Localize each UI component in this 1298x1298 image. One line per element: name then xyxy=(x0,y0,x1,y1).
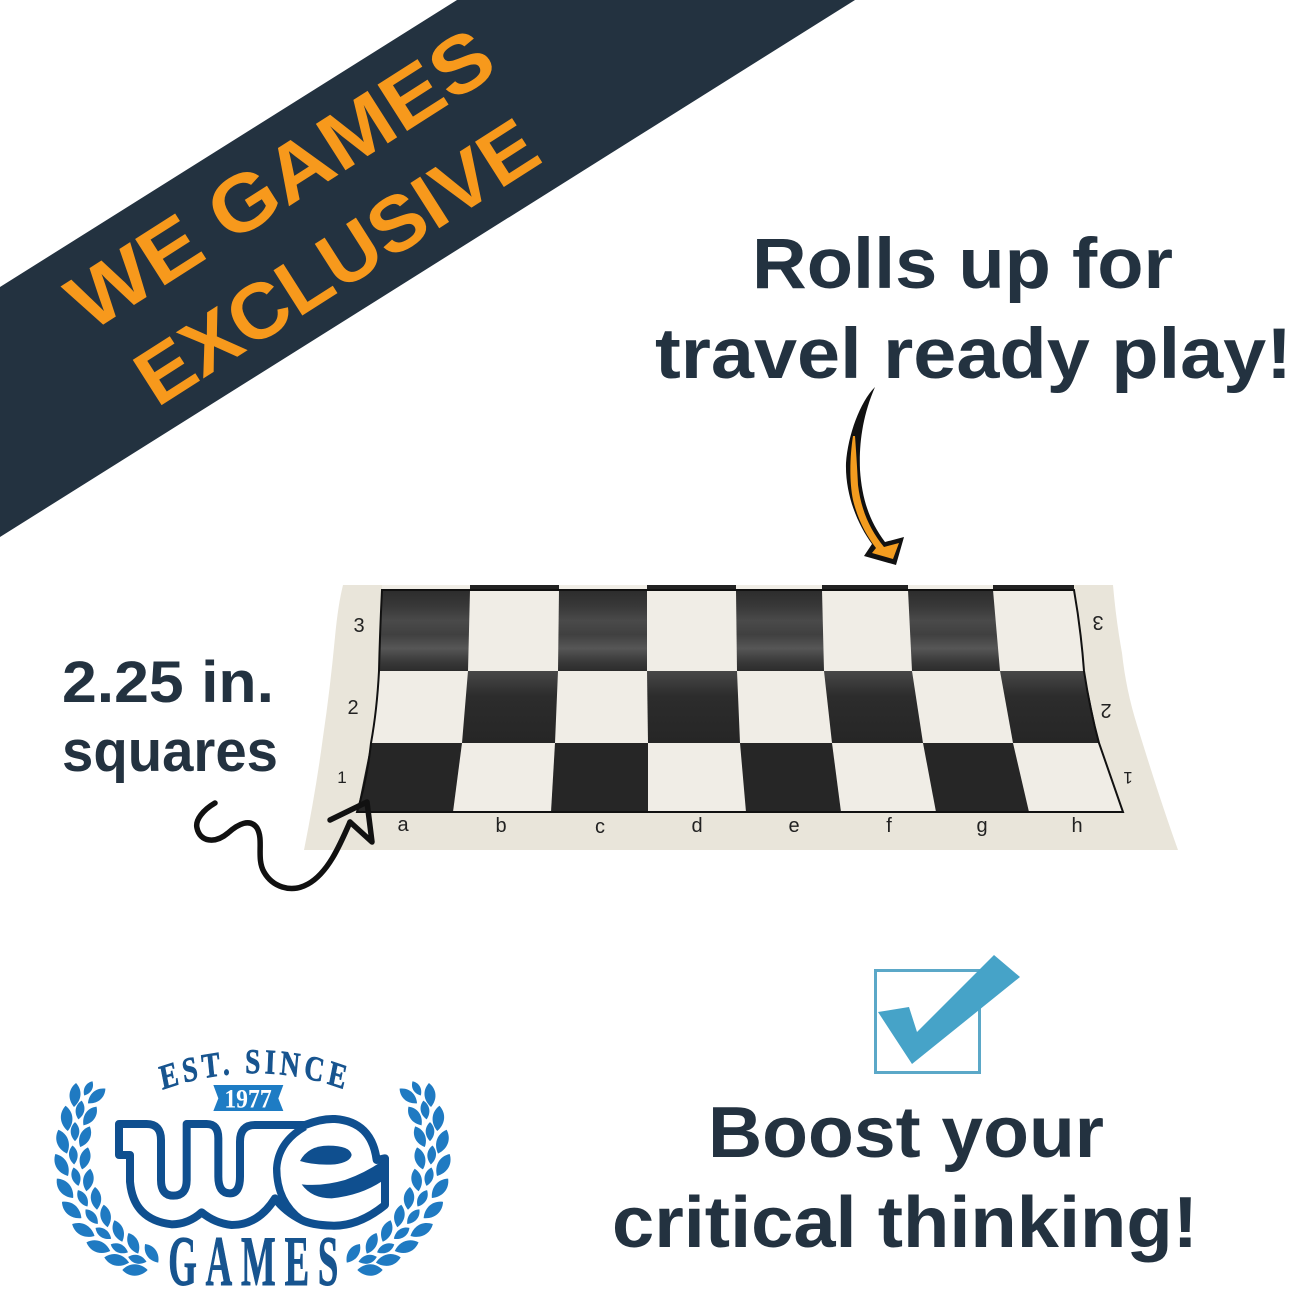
rank labels left xyxy=(337,615,365,787)
banner: we games exclusive xyxy=(0,0,855,537)
rank labels right: 3 xyxy=(1092,611,1104,633)
dark squares row 1 xyxy=(357,743,1029,812)
dark squares row 3 xyxy=(379,590,1000,671)
file labels: b xyxy=(495,815,507,837)
callout: square size: squares xyxy=(62,719,278,784)
heading: boost your critical thinking: critical thinking! xyxy=(612,1183,1198,1263)
file labels: f xyxy=(886,815,892,837)
est since arc text: EST. SINCE xyxy=(158,1050,346,1090)
file labels: d xyxy=(691,815,703,837)
mat background xyxy=(304,585,1178,850)
file labels: g xyxy=(976,815,988,837)
banner text: WE GAMES xyxy=(51,11,510,347)
light playing surface xyxy=(357,590,1123,812)
rank labels left: 2 xyxy=(347,697,359,719)
laurel left xyxy=(50,1079,162,1276)
rank labels left: 1 xyxy=(337,768,347,787)
rank labels right: 2 xyxy=(1100,699,1112,721)
rank labels left: 3 xyxy=(353,615,365,637)
icon: squiggly black arrow xyxy=(197,802,372,888)
heading: boost your critical thinking xyxy=(612,1093,1198,1263)
heading: boost your critical thinking: Boost your xyxy=(708,1093,1104,1173)
ribbon 1977: 1977 xyxy=(224,1085,272,1114)
file labels: c xyxy=(595,816,605,838)
file labels: h xyxy=(1071,815,1083,837)
icon: orange curved arrow xyxy=(846,387,904,565)
heading: rolls up for travel ready play: Rolls up for xyxy=(752,225,1173,304)
callout: square size xyxy=(62,650,278,784)
we lettering xyxy=(119,1119,388,1226)
top strip xyxy=(382,585,1074,590)
banner text: EXCLUSIVE xyxy=(119,101,554,422)
callout: square size: 2.25 in. xyxy=(62,650,274,715)
rank labels right xyxy=(1092,611,1133,787)
chess board mat xyxy=(304,585,1178,850)
file labels: a xyxy=(397,814,409,836)
file labels: e xyxy=(788,815,800,837)
heading: rolls up for travel ready play: travel ready play! xyxy=(655,315,1292,394)
banner text xyxy=(51,11,554,422)
file labels xyxy=(397,814,1083,838)
est since arc text xyxy=(158,1050,346,1090)
rank labels right: 1 xyxy=(1123,768,1133,787)
dark squares row 2 xyxy=(462,671,1099,743)
board outline xyxy=(357,590,1123,812)
heading: rolls up for travel ready play xyxy=(655,225,1292,394)
laurel right xyxy=(343,1079,455,1276)
logo: we games xyxy=(54,1050,451,1298)
icon: checkbox with check mark xyxy=(876,955,1020,1072)
